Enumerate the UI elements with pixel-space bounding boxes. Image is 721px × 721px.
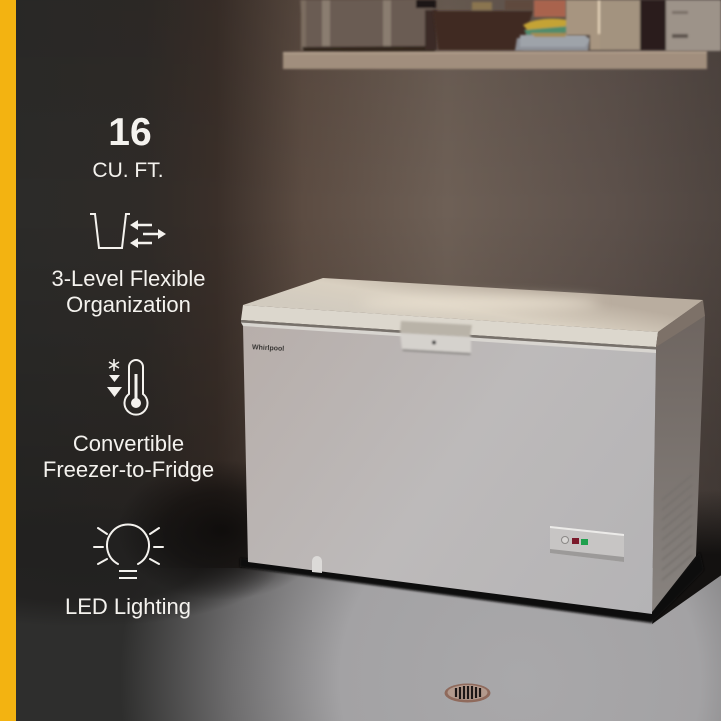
organization label: 3-Level Flexible bbox=[51, 266, 206, 291]
under-freezer shadow bbox=[240, 552, 704, 623]
white rolls and bottles bbox=[566, 0, 721, 51]
lighting label: LED Lighting bbox=[65, 594, 191, 619]
folded towels bbox=[515, 19, 590, 51]
chest freezer bbox=[240, 278, 705, 623]
icon: basket with arrows bbox=[90, 214, 166, 248]
wall shadow right of freezer bbox=[652, 490, 721, 624]
feature: convertible bbox=[43, 359, 214, 482]
feature: capacity bbox=[92, 111, 164, 182]
floor bbox=[0, 460, 721, 721]
capacity number: 16 bbox=[108, 111, 152, 154]
organization label line 2: Organization bbox=[66, 292, 191, 317]
shelf board bbox=[283, 51, 707, 69]
convertible label line 2: Freezer-to-Fridge bbox=[43, 457, 214, 482]
convertible label: Convertible bbox=[73, 431, 184, 456]
shelf with items bbox=[283, 0, 721, 69]
right side panel bbox=[652, 316, 705, 612]
basket bbox=[433, 0, 566, 50]
drain plug bbox=[312, 556, 322, 573]
lid handle bbox=[400, 321, 472, 355]
feature: LED lighting bbox=[65, 525, 191, 619]
control panel bbox=[550, 526, 624, 562]
icon: light bulb bbox=[94, 525, 163, 578]
brand logo: Whirlpool bbox=[252, 344, 284, 353]
yellow accent bar bbox=[0, 0, 16, 721]
floor drain bbox=[444, 684, 490, 702]
feature: organization bbox=[51, 214, 206, 317]
lid bbox=[241, 278, 705, 353]
front panel bbox=[243, 325, 656, 614]
bag bbox=[300, 0, 437, 54]
capacity unit: CU. FT. bbox=[92, 159, 164, 182]
icon: thermometer with snowflake bbox=[107, 359, 148, 415]
